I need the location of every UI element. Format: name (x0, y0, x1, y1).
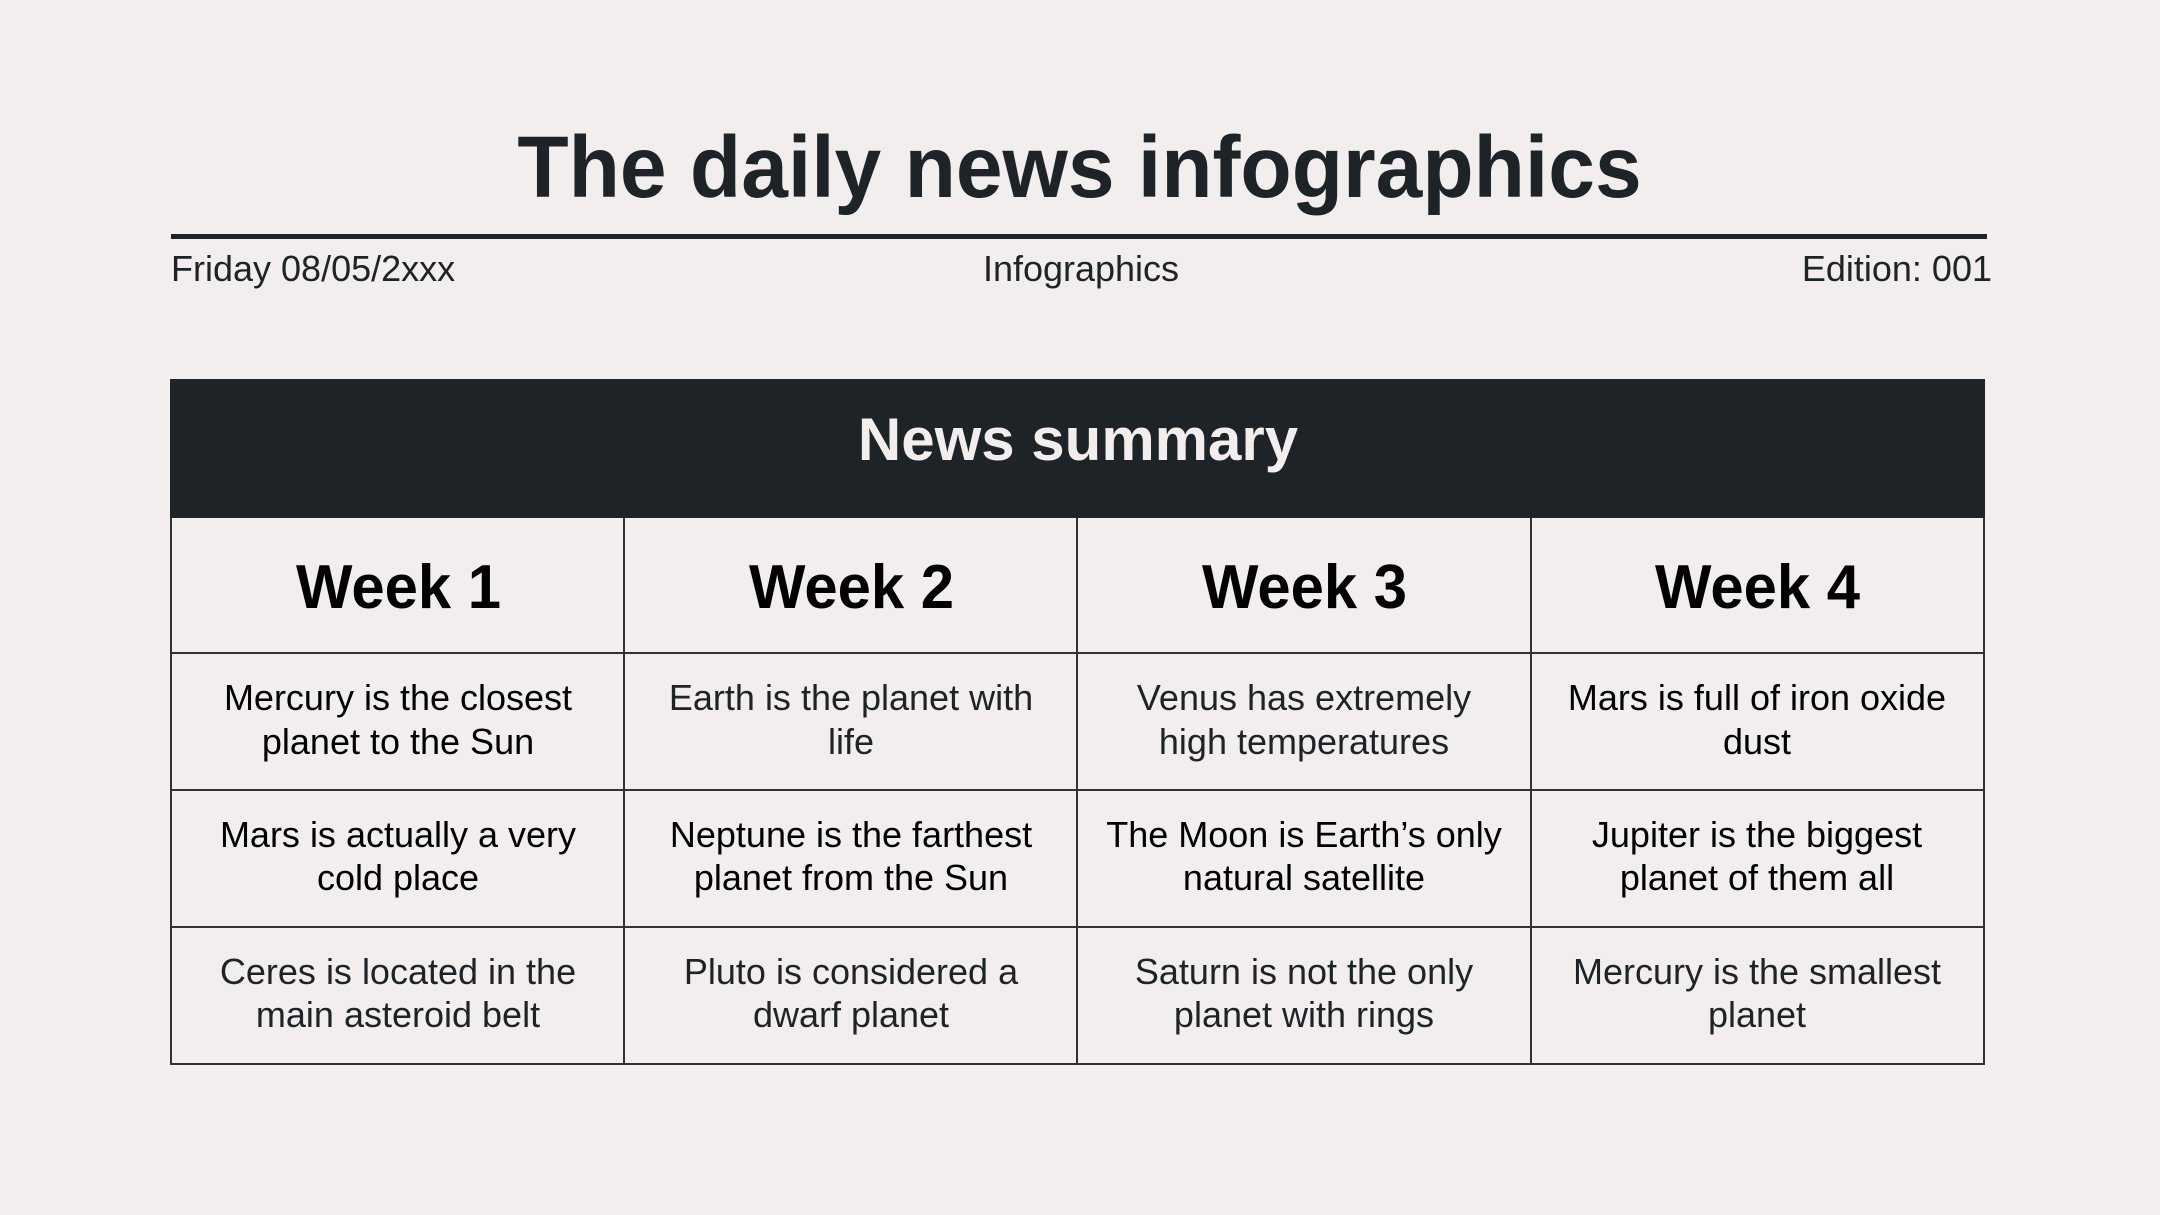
edition: Edition: 001 (1802, 248, 1992, 289)
week 3 item 2 (1106, 814, 1502, 898)
date: Friday 08/05/2xxx (171, 248, 455, 289)
section label: Infographics (983, 248, 1179, 289)
table banner (170, 379, 1985, 518)
week 1 item 3: main asteroid belt (256, 994, 540, 1035)
week 4 heading: Week 4 (1654, 553, 1860, 622)
week 2 item 3 (684, 951, 1018, 1035)
banner heading: News summary (858, 406, 1298, 472)
week 2 item 2 (670, 814, 1032, 898)
week 2 item 3: Pluto is considered a (684, 951, 1018, 992)
week 2 item 1 (669, 677, 1033, 762)
week 4 item 2 (1592, 814, 1922, 898)
week 1 item 2: Mars is actually a very (220, 814, 576, 855)
week 4 item 3 (1573, 951, 1941, 1035)
week 1 item 1: planet to the Sun (262, 721, 534, 762)
week 2 item 3: dwarf planet (753, 994, 949, 1035)
week 4 item 1 (1568, 677, 1946, 762)
week 4 item 3: Mercury is the smallest (1573, 951, 1941, 992)
week 1 item 1 (224, 677, 572, 762)
week 1 item 3 (220, 951, 576, 1035)
week 2 item 2: Neptune is the farthest (670, 814, 1032, 855)
week 2 item 1: Earth is the planet with (669, 677, 1033, 718)
week 3 item 1: Venus has extremely (1137, 677, 1471, 718)
week 3 item 1: high temperatures (1159, 721, 1449, 762)
week 1 item 2: cold place (317, 857, 479, 898)
week 1 item 1: Mercury is the closest (224, 677, 572, 718)
week 3 item 3 (1135, 951, 1473, 1035)
week 2 item 1: life (828, 721, 874, 762)
week 3 heading: Week 3 (1201, 553, 1407, 622)
week 4 item 1: Mars is full of iron oxide (1568, 677, 1946, 718)
week 3 item 3: planet with rings (1174, 994, 1434, 1035)
week 4 item 2: planet of them all (1620, 857, 1894, 898)
week 4 item 2: Jupiter is the biggest (1592, 814, 1922, 855)
week 3 item 1 (1137, 677, 1471, 762)
week 3 item 2: natural satellite (1183, 857, 1425, 898)
title: The daily news infographics (517, 119, 1642, 216)
week 1 item 3: Ceres is located in the (220, 951, 576, 992)
week 1 item 2 (220, 814, 576, 898)
week 3 item 3: Saturn is not the only (1135, 951, 1473, 992)
week 4 item 3: planet (1708, 994, 1806, 1035)
week 2 heading: Week 2 (748, 553, 954, 622)
grid lines (170, 518, 1985, 1065)
week 4 item 1: dust (1723, 721, 1791, 762)
table: news summary (170, 379, 1985, 518)
week 2 item 2: planet from the Sun (694, 857, 1008, 898)
header rule (171, 234, 1987, 239)
week 1 heading: Week 1 (295, 553, 501, 622)
week 3 item 2: The Moon is Earth’s only (1106, 814, 1502, 855)
